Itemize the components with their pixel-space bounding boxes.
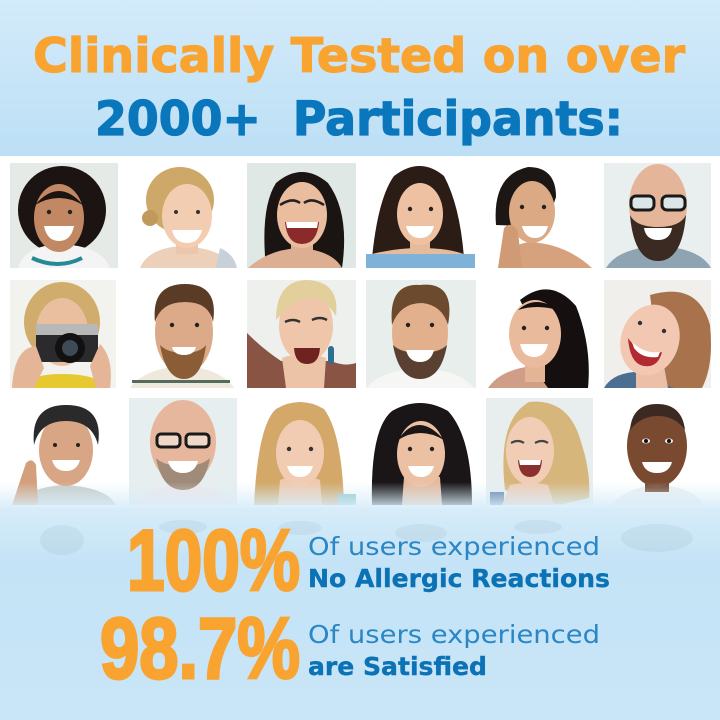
photo grid background: [0, 156, 720, 510]
photo: woman with black hair: [486, 280, 594, 388]
stat caption: are satisfied: are Satisfied: [308, 652, 487, 681]
photo: curly blonde woman laughing: [486, 398, 593, 505]
photo: bald man with glasses and beard: [604, 163, 711, 268]
photo: bald man with glasses: [129, 398, 237, 505]
photo: woman with curly dark hair: [10, 163, 118, 268]
stat caption: no allergic reactions: No Allergic Reactions: [308, 564, 610, 593]
photo: laughing woman with black hair: [247, 163, 356, 268]
stat number: 98.7%: 98.7%: [100, 601, 300, 697]
title: Clinically Tested on over: [33, 29, 686, 84]
photo: woman with long black hair: [366, 398, 475, 505]
stat: 100% no allergic reactions: [127, 513, 610, 609]
title: [33, 29, 686, 147]
photo grid: [10, 163, 711, 505]
stat: 98.7% satisfied: [100, 601, 600, 697]
fade over bottom of photos: [0, 482, 720, 510]
stat caption: are satisfied: [308, 620, 600, 681]
photo: blonde woman with long hair: [247, 398, 356, 505]
photo: woman with camera: [10, 280, 116, 388]
photo: bearded man with brown hair: [129, 280, 237, 388]
photo: older Asian man: [10, 398, 118, 505]
stat caption: are satisfied: Of users experienced: [308, 620, 600, 649]
stat caption: no allergic reactions: Of users experienced: [308, 532, 600, 561]
header background: [0, 0, 720, 156]
title: 2000+ Participants:: [95, 92, 623, 147]
photo: smiling man with quiff: [366, 280, 476, 388]
photo: woman with hand on cheek: [486, 163, 594, 268]
stat caption: no allergic reactions: [308, 532, 610, 593]
photo: blonde woman: [129, 163, 237, 268]
photo: smiling Black man: [604, 398, 711, 505]
photo: woman with long brown hair in blue top: [366, 163, 475, 268]
photo: red-haired woman: [604, 280, 711, 388]
stat number: 100%: 100%: [127, 513, 300, 609]
footer background: [0, 508, 720, 720]
faint photo reflections: [40, 520, 693, 555]
photo: short-haired blonde woman: [247, 280, 356, 388]
